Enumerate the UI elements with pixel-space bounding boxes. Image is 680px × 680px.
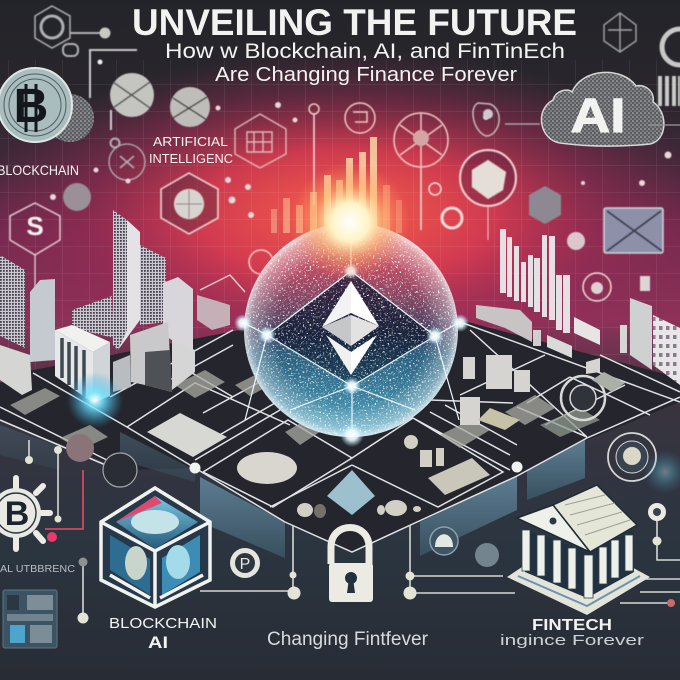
tile: coins <box>297 435 444 518</box>
label: artificial intelligence <box>149 134 233 166</box>
icon: AI cloud <box>541 72 680 146</box>
platform grid lines <box>0 323 680 552</box>
subtitle line 2: Are Changing Finance Forever <box>215 64 517 86</box>
icon: grey striped orb <box>63 183 91 211</box>
icon: bitcoin gear <box>0 478 50 549</box>
nodes <box>234 263 469 447</box>
ring icon <box>561 376 605 420</box>
big tower <box>113 210 127 350</box>
label: fintech <box>500 617 644 649</box>
inner diamond <box>267 271 435 386</box>
tower back hatched <box>140 245 166 325</box>
light burst <box>290 162 410 282</box>
label: blockchain ai: BLOCKCHAIN <box>109 615 217 632</box>
icon: bank <box>507 485 650 615</box>
tile: stacked papers <box>428 458 490 495</box>
bar chart: white bars <box>500 229 570 333</box>
icon: outline coin <box>103 453 137 487</box>
icon: brain hexagon <box>161 173 218 234</box>
icon: S hexagon: S <box>26 211 44 241</box>
icon: upper ring <box>608 433 656 481</box>
speckle <box>244 223 458 437</box>
title block <box>132 2 577 86</box>
tower low hatched <box>72 296 114 338</box>
icon: P badge: P <box>240 556 250 573</box>
icon: top left hex node <box>35 6 137 130</box>
icon: small rings <box>429 183 650 301</box>
icon: chat outline <box>473 103 540 136</box>
right city <box>460 229 680 430</box>
icon: padlock <box>329 528 373 602</box>
platform back surface <box>0 320 680 558</box>
title: UNVEILING THE FUTURE <box>132 2 577 43</box>
icon: grey hexagon <box>529 186 561 224</box>
central sphere <box>234 223 469 447</box>
tile: white map <box>147 413 227 457</box>
icon: house ring and chart <box>430 527 499 567</box>
front striped building <box>55 325 110 403</box>
low white blocks <box>476 305 532 342</box>
blue glow <box>67 372 123 428</box>
icon: AI cloud: AI <box>570 90 626 143</box>
dots <box>50 102 672 218</box>
connector nodes <box>25 446 675 624</box>
label: artificial intelligence: INTELLIGENC <box>149 151 233 166</box>
tile: diamond <box>327 470 375 515</box>
icon: P badge <box>230 548 260 578</box>
panel: small dashboard <box>3 590 57 648</box>
label: fintech: ingince Forever <box>500 632 644 649</box>
icon: crossed discs <box>110 73 210 127</box>
icon: diamond ring <box>460 150 516 240</box>
icon: striped bars top right <box>658 76 680 106</box>
icon: right edge ring <box>662 29 680 65</box>
right edge glow <box>643 450 680 494</box>
bar chart: glow bars <box>271 137 402 233</box>
red connector <box>45 470 83 542</box>
tower light <box>30 279 55 362</box>
bank roof <box>553 485 637 552</box>
icon: blockchain cube <box>101 488 210 607</box>
icon: key ring <box>648 503 666 521</box>
tile: small panels <box>10 370 600 450</box>
icon: ethereum diamond <box>322 281 379 375</box>
mid building <box>130 322 172 392</box>
label: fintech: FINTECH <box>532 617 612 634</box>
icon: small outline circles <box>109 138 145 180</box>
platform front faces <box>0 425 585 558</box>
subtitle line 1: How w Blockchain, AI, and FinTinEch <box>165 40 565 63</box>
icon: envelope <box>604 208 663 253</box>
label: blockchain ai: AI <box>148 633 168 652</box>
panel tile <box>478 408 520 430</box>
label: blockchain ai <box>109 615 217 652</box>
label: artificial intelligence: ARTIFICIAL <box>153 134 228 149</box>
tower hatched <box>0 255 25 348</box>
icon: top right compass <box>604 13 636 52</box>
icon: chip hexagon <box>235 114 286 168</box>
icon: bitcoin coin top left: B <box>14 80 48 133</box>
icon: pink ring <box>66 434 94 462</box>
bank base <box>507 565 650 615</box>
white cluster on platform <box>460 355 600 425</box>
label: changing fintfever: Changing Fintfever <box>267 629 429 650</box>
bank columns <box>522 530 633 598</box>
network lines <box>244 232 459 435</box>
icon: bitcoin coin top left <box>0 68 94 142</box>
icon: right pink circles <box>249 103 448 274</box>
icon: bitcoin gear: B <box>5 495 29 533</box>
right towers <box>630 298 652 370</box>
label: garbled small text: AL UTBBRENC <box>0 564 75 575</box>
left block <box>0 345 32 395</box>
building block <box>163 277 193 352</box>
left city <box>0 210 245 428</box>
icon: S hexagon <box>10 203 60 290</box>
top network of icons <box>10 6 680 301</box>
bottom connector lines <box>29 440 680 618</box>
tile: blob <box>237 452 297 484</box>
